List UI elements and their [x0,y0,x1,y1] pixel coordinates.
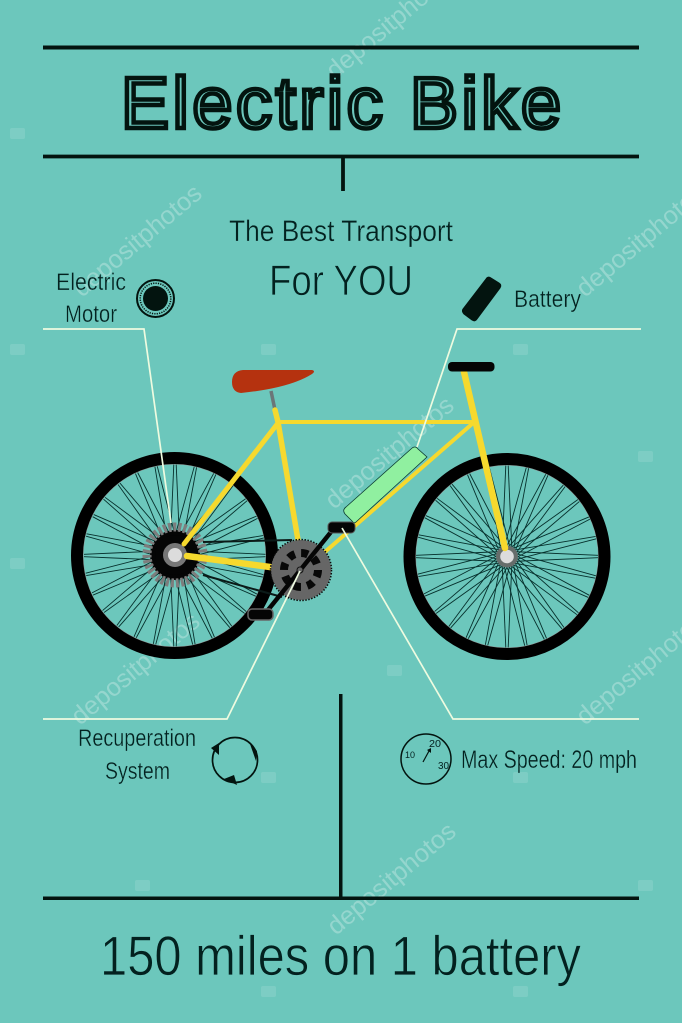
label: battery: Battery [514,286,581,313]
crank and pedals [248,522,355,620]
vertical divider [339,694,342,898]
subtitle: The Best Transport [229,215,454,248]
label: recuperation system [78,725,196,785]
front wheel [410,459,604,654]
handlebar [448,362,494,372]
title: Electric Bike [121,64,561,144]
label: recuperation system: Recuperation [78,725,196,752]
callout lines [43,329,641,719]
icon: speedometer: 20 [429,739,441,750]
subtitle [229,215,454,305]
icon: battery [462,277,501,321]
frame [184,372,505,567]
title rule and stem [43,156,639,191]
seat post [271,391,275,410]
subtitle: For YOU [269,257,413,305]
chainring [270,540,332,600]
watermark: depositphotos [322,817,462,941]
bottom rule [43,896,639,900]
watermark: depositphotos [320,391,460,515]
icon: speedometer: 30 [438,761,449,772]
icon: electric motor [137,280,174,317]
icon: speedometer: 10 [405,750,415,760]
label: electric motor [56,269,126,328]
icon: speedometer [401,734,451,784]
rear wheel [77,458,272,653]
chain [203,540,292,597]
label: electric motor: Motor [65,301,117,328]
label: recuperation system: System [105,758,170,785]
bicycle [77,362,604,654]
range statement: 150 miles on 1 battery [100,924,581,987]
battery pack [344,447,427,523]
icon: recuperation arrows [211,738,258,785]
label: electric motor: Electric [56,269,126,296]
watermark: depositphotos [68,179,208,303]
saddle [232,370,314,393]
label: max speed: Max Speed: 20 mph [461,746,637,774]
top rule [43,46,639,50]
watermark: depositphotos [66,607,206,731]
